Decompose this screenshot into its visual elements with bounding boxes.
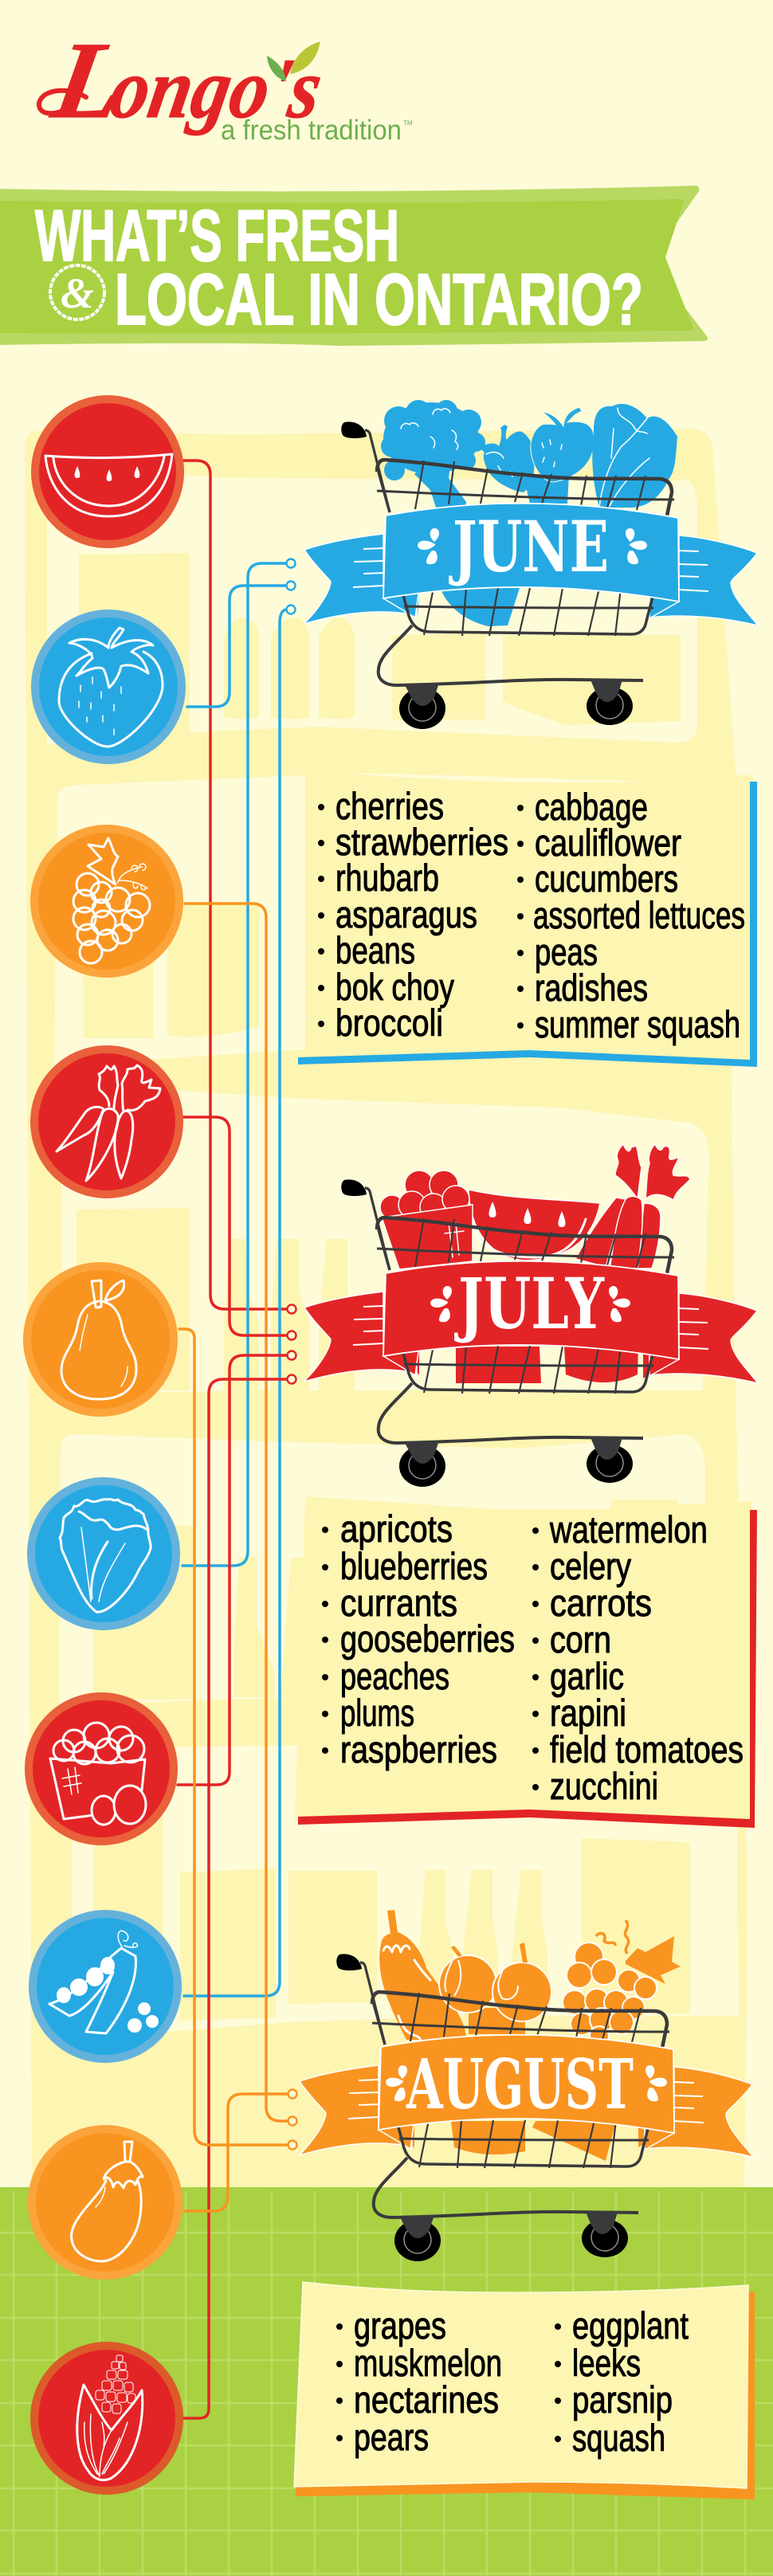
- logo swash: [39, 91, 86, 113]
- August column 2: leeks: [572, 2342, 641, 2384]
- June column 1: [318, 785, 508, 1044]
- logo wordmark: L: [44, 20, 134, 142]
- August ribbon tails: [299, 2065, 753, 2157]
- July column 1: currants: [340, 1582, 457, 1624]
- eggplant: [379, 1910, 466, 2040]
- July column 2: celery: [550, 1545, 631, 1587]
- connector: berries to July: [178, 1355, 287, 1785]
- strawberries: [480, 407, 594, 504]
- June column 1: rhubarb: [335, 857, 439, 899]
- July column 2: garlic: [550, 1655, 624, 1697]
- icon: eggplant: [28, 2125, 182, 2280]
- July column 1: raspberries: [340, 1728, 497, 1770]
- July column 1: blueberries: [340, 1545, 488, 1587]
- icon: pear: [23, 1262, 178, 1417]
- June column 1: broccoli: [335, 1002, 443, 1044]
- July banner: [383, 1261, 679, 1359]
- June column 2: [517, 786, 745, 1045]
- logo leaves: [267, 41, 320, 81]
- produce below ribbon: [402, 1347, 651, 1383]
- June column 1: asparagus: [335, 893, 477, 935]
- July column 2: [532, 1508, 744, 1807]
- July column 1: apricots: [340, 1508, 453, 1550]
- flourish right: [645, 2065, 667, 2101]
- logo wordmark: ongo's: [104, 41, 329, 136]
- panel: July list: [295, 1496, 757, 1828]
- connector: lettuce to June: [182, 563, 287, 1566]
- connector: watermelon to July: [183, 461, 287, 1309]
- logo: Longo's a fresh tradition: [39, 20, 413, 146]
- August column 1: nectarines: [354, 2378, 499, 2421]
- June column 1: cherries: [335, 785, 444, 827]
- June produce: [381, 400, 677, 626]
- panel: June list: [298, 773, 757, 1067]
- June ribbon tails: [304, 534, 758, 625]
- connector nodes: [287, 559, 296, 2150]
- connector: grapes to August: [185, 904, 288, 2121]
- background: green floor: [0, 2187, 773, 2576]
- July column 1: plums: [340, 1692, 414, 1734]
- August column 1: grapes: [354, 2304, 446, 2347]
- June column 2: cucumbers: [535, 857, 678, 900]
- watermelon slice: [469, 1190, 600, 1261]
- July heading: JULY: [454, 1262, 605, 1345]
- icon: grapes: [30, 825, 183, 978]
- broccoli: [381, 400, 520, 626]
- logo tagline: a fresh tradition: [221, 115, 402, 146]
- June banner: [383, 504, 679, 602]
- June column 1: beans: [335, 929, 415, 971]
- title banner: [0, 186, 708, 346]
- basket of berries: [380, 1170, 473, 1269]
- June column 2: cabbage: [535, 786, 648, 828]
- June column 1: bok choy: [335, 966, 454, 1008]
- icon: watermelon: [31, 395, 184, 548]
- peaches: [439, 1943, 551, 2034]
- flourish left: [430, 1286, 452, 1322]
- connector lines: [178, 461, 288, 2418]
- carrots: [575, 1144, 690, 1268]
- icon: peas: [29, 1910, 182, 2063]
- flourish left: [386, 2065, 407, 2101]
- lettuce: [592, 404, 677, 508]
- connector: peas to June: [184, 610, 287, 1996]
- August column 2: [555, 2304, 689, 2459]
- August produce: [379, 1910, 681, 2161]
- August heading: AUGUST: [406, 2045, 634, 2125]
- August banner: [379, 2035, 674, 2133]
- icon: lettuce: [27, 1477, 180, 1630]
- August column 2: eggplant: [572, 2304, 689, 2347]
- icon: corn: [30, 2342, 183, 2495]
- July column 2: zucchini: [550, 1765, 658, 1807]
- June cart: [341, 421, 674, 729]
- icon: carrots: [30, 1045, 183, 1198]
- August column 1: pears: [354, 2416, 429, 2458]
- flourish right: [626, 528, 647, 564]
- July produce: [380, 1144, 690, 1383]
- icon: strawberry: [31, 610, 186, 764]
- trademark: TM: [403, 120, 413, 127]
- August column 1: muskmelon: [354, 2342, 502, 2384]
- July ribbon tails: [304, 1292, 758, 1383]
- flourish left: [418, 528, 439, 564]
- ampersand badge: &: [61, 269, 94, 317]
- panel: August list: [294, 2282, 755, 2500]
- August cart: [336, 1954, 669, 2261]
- June column 2: radishes: [535, 966, 648, 1009]
- June heading: JUNE: [449, 505, 609, 588]
- July column 2: rapini: [550, 1692, 626, 1734]
- title line 1: WHAT’S FRESH: [35, 196, 399, 276]
- connector: eggplant to August: [184, 2094, 288, 2211]
- July column 2: corn: [550, 1618, 611, 1660]
- ampersand badge: [50, 265, 104, 320]
- icon: basket of berries: [25, 1692, 178, 1845]
- connector: strawberry to June: [187, 586, 287, 707]
- August column 2: parsnip: [572, 2378, 673, 2421]
- August column 1: [336, 2304, 502, 2458]
- connector: corn to July: [183, 1379, 287, 2418]
- July column 1: peaches: [340, 1655, 449, 1697]
- July column 2: watermelon: [549, 1508, 708, 1551]
- June column 2: cauliflower: [535, 821, 681, 864]
- June column 2: peas: [535, 931, 598, 973]
- connector: carrots to July: [183, 1117, 287, 1335]
- July column 1: [322, 1508, 515, 1770]
- flourish right: [609, 1286, 630, 1322]
- June column 1: strawberries: [335, 821, 508, 863]
- connector: pear to August: [179, 1329, 288, 2145]
- grapes: [563, 1920, 681, 2045]
- August column 2: squash: [572, 2417, 665, 2459]
- July column 2: carrots: [550, 1582, 652, 1624]
- produce below ribbon: [399, 2121, 647, 2161]
- July cart: [341, 1179, 674, 1487]
- July column 1: gooseberries: [340, 1617, 515, 1660]
